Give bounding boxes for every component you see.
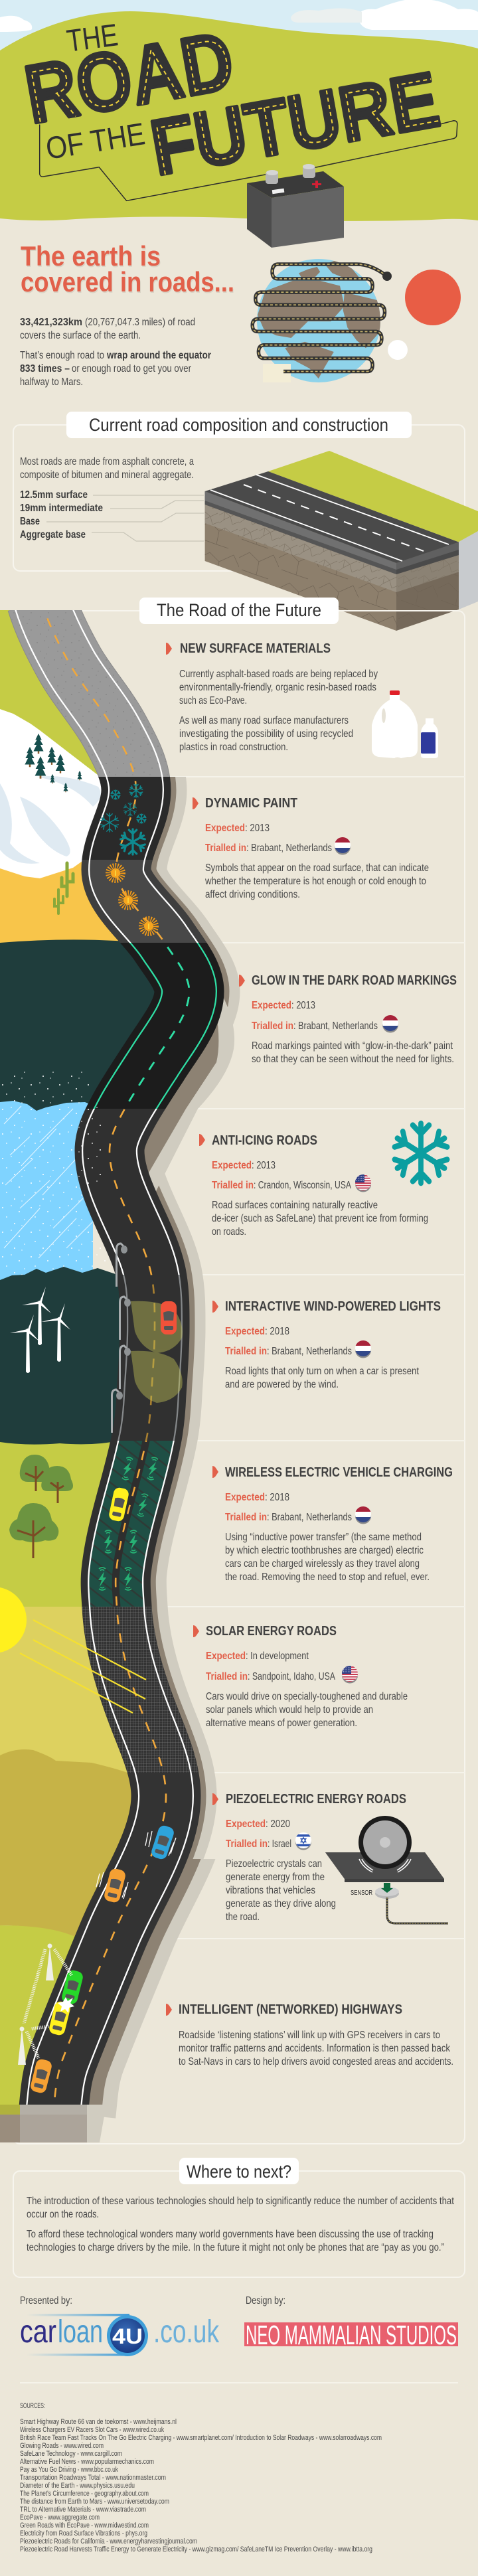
icons: wireless charging bolts bbox=[98, 1457, 159, 1590]
item heading: INTERACTIVE WIND-POWERED LIGHTS bbox=[225, 1299, 441, 1314]
item heading: DYNAMIC PAINT bbox=[205, 796, 297, 811]
grey side bbox=[459, 531, 478, 609]
chevron bbox=[199, 1134, 205, 1146]
chevron bbox=[193, 1625, 199, 1637]
heading: the earth is covered in roads: The earth is bbox=[21, 240, 161, 272]
item description bbox=[179, 669, 378, 753]
road statistics text: 833 times – bbox=[20, 363, 70, 374]
item heading: INTELLIGENT (NETWORKED) HIGHWAYS bbox=[179, 2002, 402, 2017]
item description: Currently asphalt-based roads are being replaced by bbox=[179, 669, 378, 680]
car: green bbox=[60, 1969, 84, 2005]
sources: Smart Highway Route 66 van de toekomst - www.heijmans.nl bbox=[20, 2418, 177, 2426]
flag: Netherlands bbox=[382, 1015, 398, 1033]
road section: wireless charging bbox=[81, 1441, 182, 1607]
expected date: : 2013 bbox=[245, 823, 270, 834]
expected date: Expected bbox=[225, 1326, 265, 1337]
item description: affect driving conditions. bbox=[205, 889, 300, 900]
icy blue water bbox=[0, 1101, 93, 1281]
chevron bbox=[166, 643, 172, 655]
green field bbox=[0, 1442, 110, 1607]
expected date: Expected bbox=[205, 823, 245, 834]
illustration: wind turbines bbox=[10, 1287, 70, 1373]
logo: carloan4u.co.uk: loan bbox=[58, 2314, 103, 2350]
expected date: Expected bbox=[226, 1818, 266, 1830]
item description: generate as they drive along bbox=[226, 1898, 336, 1909]
expected date: : 2020 bbox=[266, 1818, 290, 1830]
trial location bbox=[225, 1512, 352, 1523]
item description: plastics in road construction. bbox=[179, 742, 288, 753]
flag: Netherlands bbox=[355, 1340, 371, 1358]
illustration: cacti bbox=[54, 863, 73, 914]
sources: British Race Team Fast Tracks On The Go Electric Charging - www.smartplanet.com/ Introduction to Solar Roadways - www.solarroadways.com bbox=[20, 2434, 382, 2442]
trial location: Trialled in bbox=[226, 1838, 268, 1850]
item description: As well as many road surface manufacturers bbox=[179, 715, 349, 726]
road statistics text: wrap around the equator bbox=[106, 350, 211, 361]
road surface bbox=[41, 601, 189, 2115]
trial location bbox=[212, 1180, 352, 1191]
car: blue bbox=[150, 1824, 175, 1860]
road plate bbox=[325, 1852, 444, 1882]
illustration: snowy mountain with pines bbox=[0, 709, 112, 878]
item: wireless electric vehicle charging bbox=[212, 1465, 453, 1583]
layer leader lines bbox=[46, 495, 204, 541]
grass bbox=[268, 451, 478, 542]
desert bbox=[0, 862, 118, 943]
road section: wind-powered lights bbox=[110, 1275, 190, 1441]
illustration: sparkles on road edge bbox=[78, 1105, 102, 1192]
title word: FUTURE: FUTURE bbox=[145, 56, 445, 193]
flag: USA bbox=[355, 1174, 371, 1192]
title bbox=[19, 15, 445, 193]
layer labels bbox=[20, 489, 103, 540]
serpentine road bbox=[252, 264, 387, 372]
logo: carloan4u.co.uk: 4U bbox=[112, 2324, 143, 2348]
pressure arrow bbox=[381, 1883, 393, 1893]
heading: the earth is covered in roads: The earth is bbox=[21, 242, 161, 273]
road statistics text: 33,421,323km bbox=[20, 317, 82, 328]
item description: Symbols that appear on the road surface, that can indicate bbox=[205, 862, 429, 874]
road section: standard recycled surface bbox=[8, 610, 170, 777]
sources: Wireless Chargers EV Racers Slot Cars - www.wired.co.uk bbox=[20, 2426, 164, 2434]
panel: current road composition bbox=[13, 425, 465, 571]
expected date: : In development bbox=[246, 1650, 309, 1662]
item description: the road. bbox=[226, 1911, 260, 1923]
expected date bbox=[206, 1650, 309, 1662]
icons: orange suns on road bbox=[108, 866, 156, 933]
road statistics text bbox=[20, 317, 211, 388]
sources: Diameter of the Earth - www.physics.usu.edu bbox=[20, 2482, 135, 2490]
header scene bbox=[0, 0, 478, 221]
item description: de-icer (such as SafeLane) that prevent ice from forming bbox=[212, 1213, 428, 1224]
road section: solar panels bbox=[82, 1607, 199, 1773]
expected date: : 2018 bbox=[265, 1326, 289, 1337]
chevron bbox=[239, 975, 245, 987]
layer labels: 19mm intermediate bbox=[20, 503, 103, 514]
title word: ROAD: ROAD bbox=[19, 15, 240, 141]
item: intelligent networked highways bbox=[166, 2002, 453, 2067]
item: interactive wind-powered lights bbox=[212, 1299, 441, 1390]
light pools bbox=[131, 1301, 183, 1403]
item: solar energy roads bbox=[193, 1624, 408, 1729]
chevron bbox=[212, 1466, 218, 1478]
illustration: tyre on sensor plate bbox=[325, 1816, 448, 1923]
item: new surface materials bbox=[166, 641, 438, 758]
battery bbox=[247, 164, 344, 248]
illustration: globe wrapped in road bbox=[252, 259, 461, 382]
layer labels: Base bbox=[20, 516, 40, 527]
item heading: SOLAR ENERGY ROADS bbox=[206, 1624, 337, 1639]
item heading: ANTI-ICING ROADS bbox=[212, 1133, 317, 1148]
sources: Electricity from Road Surface Vibrations - phys.org bbox=[20, 2530, 147, 2537]
item description: such as Eco-Pave. bbox=[179, 695, 247, 706]
expected date: : 2013 bbox=[291, 1000, 315, 1011]
icon: large snowflake bbox=[393, 1123, 449, 1183]
car: orange lower bbox=[29, 2058, 53, 2094]
conclusion text bbox=[27, 2196, 455, 2253]
item description bbox=[179, 2030, 453, 2067]
road section: dynamic paint hot bbox=[81, 860, 207, 943]
panel: road of the future frame bbox=[13, 611, 465, 2144]
expected date: Expected bbox=[252, 1000, 291, 1011]
item heading: NEW SURFACE MATERIALS bbox=[180, 641, 331, 656]
trial location: : Israel bbox=[268, 1838, 291, 1850]
logo: carloan4u.co.uk: car bbox=[20, 2314, 56, 2350]
asphalt surface bbox=[205, 471, 459, 563]
trial location: : Brabant, Netherlands bbox=[246, 843, 332, 854]
trial location: Trialled in bbox=[205, 843, 246, 854]
rain streaks bbox=[4, 1106, 93, 1259]
sources: Green Roads with EcoPave - www.midwestind.com bbox=[20, 2522, 149, 2530]
hills bbox=[0, 1749, 131, 1936]
illustration: street lamps and light pools bbox=[112, 1244, 183, 1433]
expected date: Expected bbox=[206, 1650, 246, 1662]
road statistics text: halfway to Mars. bbox=[20, 376, 83, 388]
trial location: Trialled in bbox=[212, 1180, 254, 1191]
right face layers bbox=[396, 542, 459, 631]
item description: cars can be charged wirelessly as they travel along bbox=[225, 1558, 420, 1570]
item description: alternative means of power generation. bbox=[206, 1718, 357, 1729]
logo: carloan4u.co.uk: .co.uk bbox=[153, 2314, 220, 2350]
title words: OF THE: OF THE bbox=[43, 116, 147, 166]
battery wires bbox=[40, 121, 457, 201]
heading: the road of the future bbox=[139, 598, 339, 624]
chevron bbox=[212, 1793, 218, 1805]
item description bbox=[226, 1858, 336, 1923]
composition intro text: Most roads are made from asphalt concrete, a bbox=[20, 456, 194, 467]
mars bbox=[405, 270, 461, 325]
dark windfarm ground bbox=[0, 1267, 120, 1445]
item: anti-icing roads bbox=[199, 1123, 449, 1238]
item description bbox=[225, 1532, 430, 1583]
road section: piezoelectric and intelligent highway bbox=[19, 1773, 200, 2105]
section dividers bbox=[153, 777, 465, 1939]
expected date: : 2013 bbox=[252, 1160, 276, 1171]
road section: dynamic paint cold bbox=[82, 777, 171, 860]
flag: Netherlands bbox=[335, 837, 351, 855]
panel: where to next bbox=[13, 2158, 465, 2277]
icon: plastic jug bbox=[372, 690, 418, 758]
heading: the earth is covered in roads: covered in roads... bbox=[21, 266, 234, 297]
item description: generate energy from the bbox=[226, 1872, 325, 1883]
sources: Piezoelectric Road Harvests Traffic Energy to Generate Electricity - www.gizmag.com/ SafeLaneTM Ice Prevention Overlay - www.ibtta.org bbox=[20, 2545, 372, 2553]
sources: Pay as You Go Driving - www.bbc.co.uk bbox=[20, 2466, 118, 2474]
flag: Netherlands bbox=[355, 1506, 371, 1524]
car: orange bbox=[103, 1868, 127, 1903]
heading: the earth is covered in roads bbox=[21, 240, 235, 299]
road statistics text: covers the surface of the earth. bbox=[20, 330, 141, 341]
trial location: Trialled in bbox=[225, 1346, 267, 1357]
item description: whether the temperature is hot enough or cold enough to bbox=[204, 876, 426, 887]
illustration: sun and rays bbox=[0, 1587, 146, 1713]
tyre bbox=[358, 1816, 412, 1869]
item description: environmentally-friendly, organic resin-based roads bbox=[179, 682, 376, 693]
sources: SafeLane Technology - www.cargill.com bbox=[20, 2450, 122, 2458]
item heading: PIEZOELECTRIC ENERGY ROADS bbox=[226, 1792, 406, 1807]
vibration lines bbox=[96, 1831, 176, 1899]
illustration: trees bbox=[9, 1455, 73, 1558]
road statistics text: or enough road to get you over bbox=[72, 363, 191, 374]
heading: where to next bbox=[179, 2158, 299, 2184]
sources: Alternative Fuel News - www.popularmechanics.com bbox=[20, 2458, 154, 2466]
road section: glow in the dark bbox=[85, 943, 224, 1109]
vibration arcs bbox=[359, 1859, 411, 1872]
road shadow bbox=[89, 777, 240, 2118]
item: dynamic paint bbox=[193, 796, 429, 900]
trial location: : Sandpoint, Idaho, USA bbox=[248, 1671, 336, 1682]
flag: USA bbox=[342, 1666, 358, 1684]
sources: Transportation Roadways Total - www.nationmaster.com bbox=[20, 2474, 166, 2482]
title word: THE: THE bbox=[64, 17, 120, 58]
sensor disc bbox=[375, 1888, 399, 1899]
sources: SOURCES: bbox=[20, 2402, 45, 2410]
logo: carloan4u.co.uk bbox=[20, 2314, 220, 2356]
car: yellow bbox=[48, 2000, 72, 2036]
sources bbox=[20, 2402, 382, 2553]
item description: Road lights that only turn on when a car is present bbox=[225, 1366, 420, 1377]
pale square bbox=[263, 364, 291, 382]
item description: by which electric toothbrushes are charged) electric bbox=[225, 1545, 424, 1556]
road statistics text: (20,767,047.3 miles) of road bbox=[85, 317, 195, 328]
signal waves bbox=[24, 1949, 72, 2058]
heading: current road composition bbox=[66, 412, 412, 438]
trial location bbox=[225, 1346, 352, 1357]
car: yellow charging bbox=[108, 1487, 129, 1522]
chevron bbox=[212, 1301, 218, 1313]
heading: current road composition: Current road composition and construction bbox=[89, 415, 388, 435]
flag: Israel bbox=[295, 1832, 311, 1850]
road section: anti-icing bbox=[74, 1109, 187, 1275]
item description: and are powered by the wind. bbox=[225, 1379, 339, 1390]
item description bbox=[252, 1040, 454, 1065]
icon: bottle bbox=[421, 718, 438, 758]
sources: The Planet's Circumference - geography.about.com bbox=[20, 2490, 149, 2498]
item description: solar panels which would help to provide an bbox=[206, 1704, 373, 1716]
road statistics text: That’s enough road to bbox=[20, 350, 104, 361]
item description: Using “inductive power transfer” (the same method bbox=[225, 1532, 422, 1543]
trial location: Trialled in bbox=[206, 1671, 248, 1682]
credit: presented by label: Presented by: bbox=[20, 2295, 72, 2306]
chevron bbox=[193, 797, 199, 809]
expected date: Expected bbox=[212, 1160, 252, 1171]
composition intro text: composite of bitumen and mineral aggregate. bbox=[20, 469, 194, 481]
heading: the road of the future: The Road of the Future bbox=[157, 600, 321, 620]
pine trees bbox=[25, 734, 82, 792]
trial location: : Brabant, Netherlands bbox=[267, 1512, 352, 1523]
credit: design by label: Design by: bbox=[246, 2295, 285, 2306]
green hill bbox=[0, 11, 478, 221]
item description bbox=[212, 1200, 428, 1238]
layer labels: 12.5mm surface bbox=[20, 489, 88, 501]
chevron bbox=[166, 2004, 172, 2016]
item description bbox=[204, 862, 429, 900]
sources: EcoPave - www.aggregate.com bbox=[20, 2514, 100, 2522]
scenery left of the road bbox=[0, 610, 154, 2142]
icons: teal snowflakes on road bbox=[100, 784, 146, 854]
crash star bbox=[58, 1997, 74, 2013]
expected date: : 2018 bbox=[265, 1492, 289, 1503]
bottom band bbox=[0, 2105, 20, 2115]
item: glow in the dark road markings bbox=[239, 973, 457, 1065]
trial location bbox=[252, 1020, 378, 1032]
sunlit field bbox=[0, 1607, 127, 1773]
green meadow bbox=[0, 610, 98, 775]
expected date: Expected bbox=[225, 1492, 265, 1503]
trial location: : Brabant, Netherlands bbox=[267, 1346, 352, 1357]
left face layers bbox=[205, 491, 396, 631]
car: red bbox=[161, 1301, 177, 1334]
item description: Road surfaces containing naturally reactive bbox=[212, 1200, 378, 1211]
clouds bbox=[0, 0, 478, 32]
item description bbox=[225, 1366, 420, 1390]
item description: Piezoelectric crystals can bbox=[226, 1858, 322, 1870]
item description: vibrations that vehicles bbox=[226, 1885, 315, 1896]
trial location: : Brabant, Netherlands bbox=[293, 1020, 378, 1032]
illustration: networked cars and listening stations bbox=[18, 1824, 176, 2094]
sources: Piezoelectric Roads for California - www.energyharvestingjournal.com bbox=[20, 2537, 197, 2545]
sensor label: SENSOR bbox=[351, 1890, 372, 1897]
sources: Glowing Roads - www.wired.com bbox=[20, 2442, 104, 2450]
sensor cable bbox=[387, 1897, 448, 1923]
layer labels: Aggregate base bbox=[20, 529, 86, 540]
listening station masts bbox=[18, 1947, 54, 2065]
night landscape bbox=[0, 939, 154, 1111]
illustration: road cross-section block bbox=[205, 451, 478, 631]
trial location bbox=[205, 843, 332, 854]
item: piezoelectric energy roads bbox=[212, 1792, 448, 1923]
item description: investigating the possibility of using recycled bbox=[179, 728, 353, 740]
trial location: : Crandon, Wisconsin, USA bbox=[254, 1180, 352, 1191]
item description: Cars would drive on specially-toughened and durable bbox=[206, 1691, 408, 1702]
trial location: Trialled in bbox=[225, 1512, 267, 1523]
composition intro text bbox=[20, 456, 194, 481]
trial location: Trialled in bbox=[252, 1020, 293, 1032]
item description: on roads. bbox=[212, 1226, 246, 1238]
road end slab bbox=[20, 2105, 106, 2142]
sources: The distance from Earth to Mars - www.universetoday.com bbox=[20, 2498, 169, 2506]
moon bbox=[388, 340, 408, 360]
heading: the earth is covered in roads: covered in roads... bbox=[21, 268, 235, 299]
lower meadow bbox=[0, 1925, 74, 2105]
heading: where to next: Where to next? bbox=[187, 2162, 291, 2182]
conclusion text: occur on the roads. bbox=[27, 2209, 99, 2220]
item description: the road. Removing the need to stop and refuel, ever. bbox=[225, 1571, 430, 1583]
trial location bbox=[206, 1671, 336, 1682]
item description bbox=[206, 1691, 408, 1729]
sources: TRL to Alternative Materials - www.viastrade.com bbox=[20, 2506, 146, 2514]
continents bbox=[258, 260, 381, 378]
